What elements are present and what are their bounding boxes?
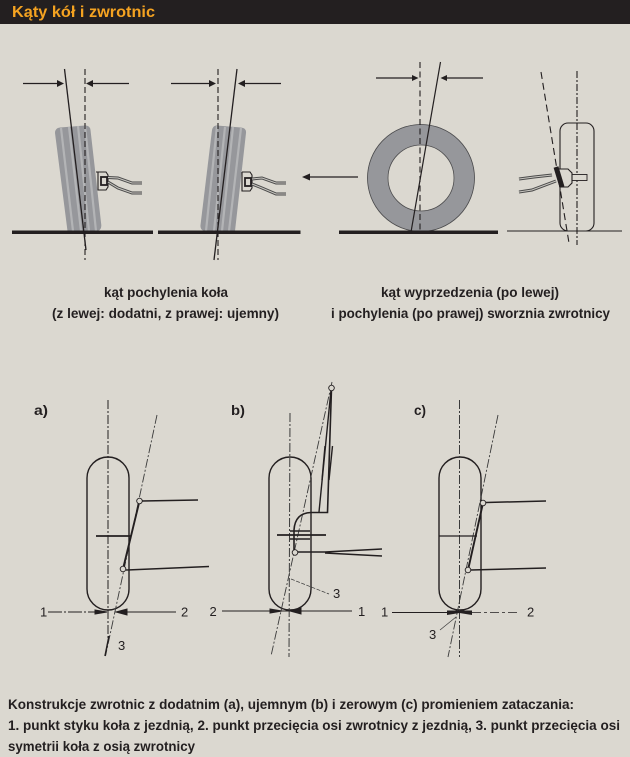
title: Kąty kół i zwrotnic [12, 4, 155, 21]
caption: caster and kingpin angle [331, 284, 610, 321]
diagram c: zero scrub radius [381, 400, 546, 657]
diagram a: positive scrub radius [34, 400, 209, 656]
caption: steering knuckle constructions [8, 696, 620, 754]
icon: steering knuckle [242, 172, 286, 194]
caption: camber angle [52, 284, 279, 321]
arrow: pointing left [302, 174, 358, 180]
diagram b: negative scrub radius: 2 [210, 604, 217, 619]
caption: steering knuckle constructions: Konstrukcje zwrotnic z dodatnim (a), ujemnym (b) i zerowym (c) promieniem zataczania: [8, 696, 574, 712]
header bar [0, 0, 630, 24]
diagram: caster tyre side view [339, 62, 498, 234]
label b: b) [231, 402, 245, 418]
diagram a: positive scrub radius: 1 [40, 604, 47, 620]
diagram b: negative scrub radius: 1 [358, 604, 365, 619]
caption: camber angle: (z lewej: dodatni, z prawej: ujemny) [52, 305, 279, 321]
diagram: kingpin inclination front view [507, 71, 622, 245]
diagram c: zero scrub radius: 3 [429, 627, 436, 642]
caption: camber angle: kąt pochylenia koła [104, 284, 228, 300]
caption: caster and kingpin angle: kąt wyprzedzenia (po lewej) [381, 284, 559, 300]
diagram: positive camber wheel [12, 69, 153, 260]
diagram a: positive scrub radius: 3 [118, 638, 125, 653]
caption: caster and kingpin angle: i pochylenia (po prawej) sworznia zwrotnicy [331, 305, 610, 321]
caption: steering knuckle constructions: symetrii koła z osią zwrotnicy [8, 738, 195, 754]
label a: a) [34, 402, 48, 418]
diagram b: negative scrub radius [210, 382, 382, 657]
diagram b: negative scrub radius: 3 [333, 586, 340, 601]
icon: hub and axle [519, 167, 587, 192]
caption: steering knuckle constructions: 1. punkt styku koła z jezdnią, 2. punkt przecięcia osi zwrotnicy z jezdnią, 3. punkt przecięcia osi [8, 717, 620, 733]
diagram: negative camber wheel [158, 69, 300, 260]
diagram a: positive scrub radius: 2 [181, 604, 188, 620]
icon: steering knuckle [96, 172, 142, 193]
label c: c) [414, 402, 426, 418]
diagram c: zero scrub radius: 2 [527, 604, 534, 620]
diagram c: zero scrub radius: 1 [381, 604, 388, 620]
